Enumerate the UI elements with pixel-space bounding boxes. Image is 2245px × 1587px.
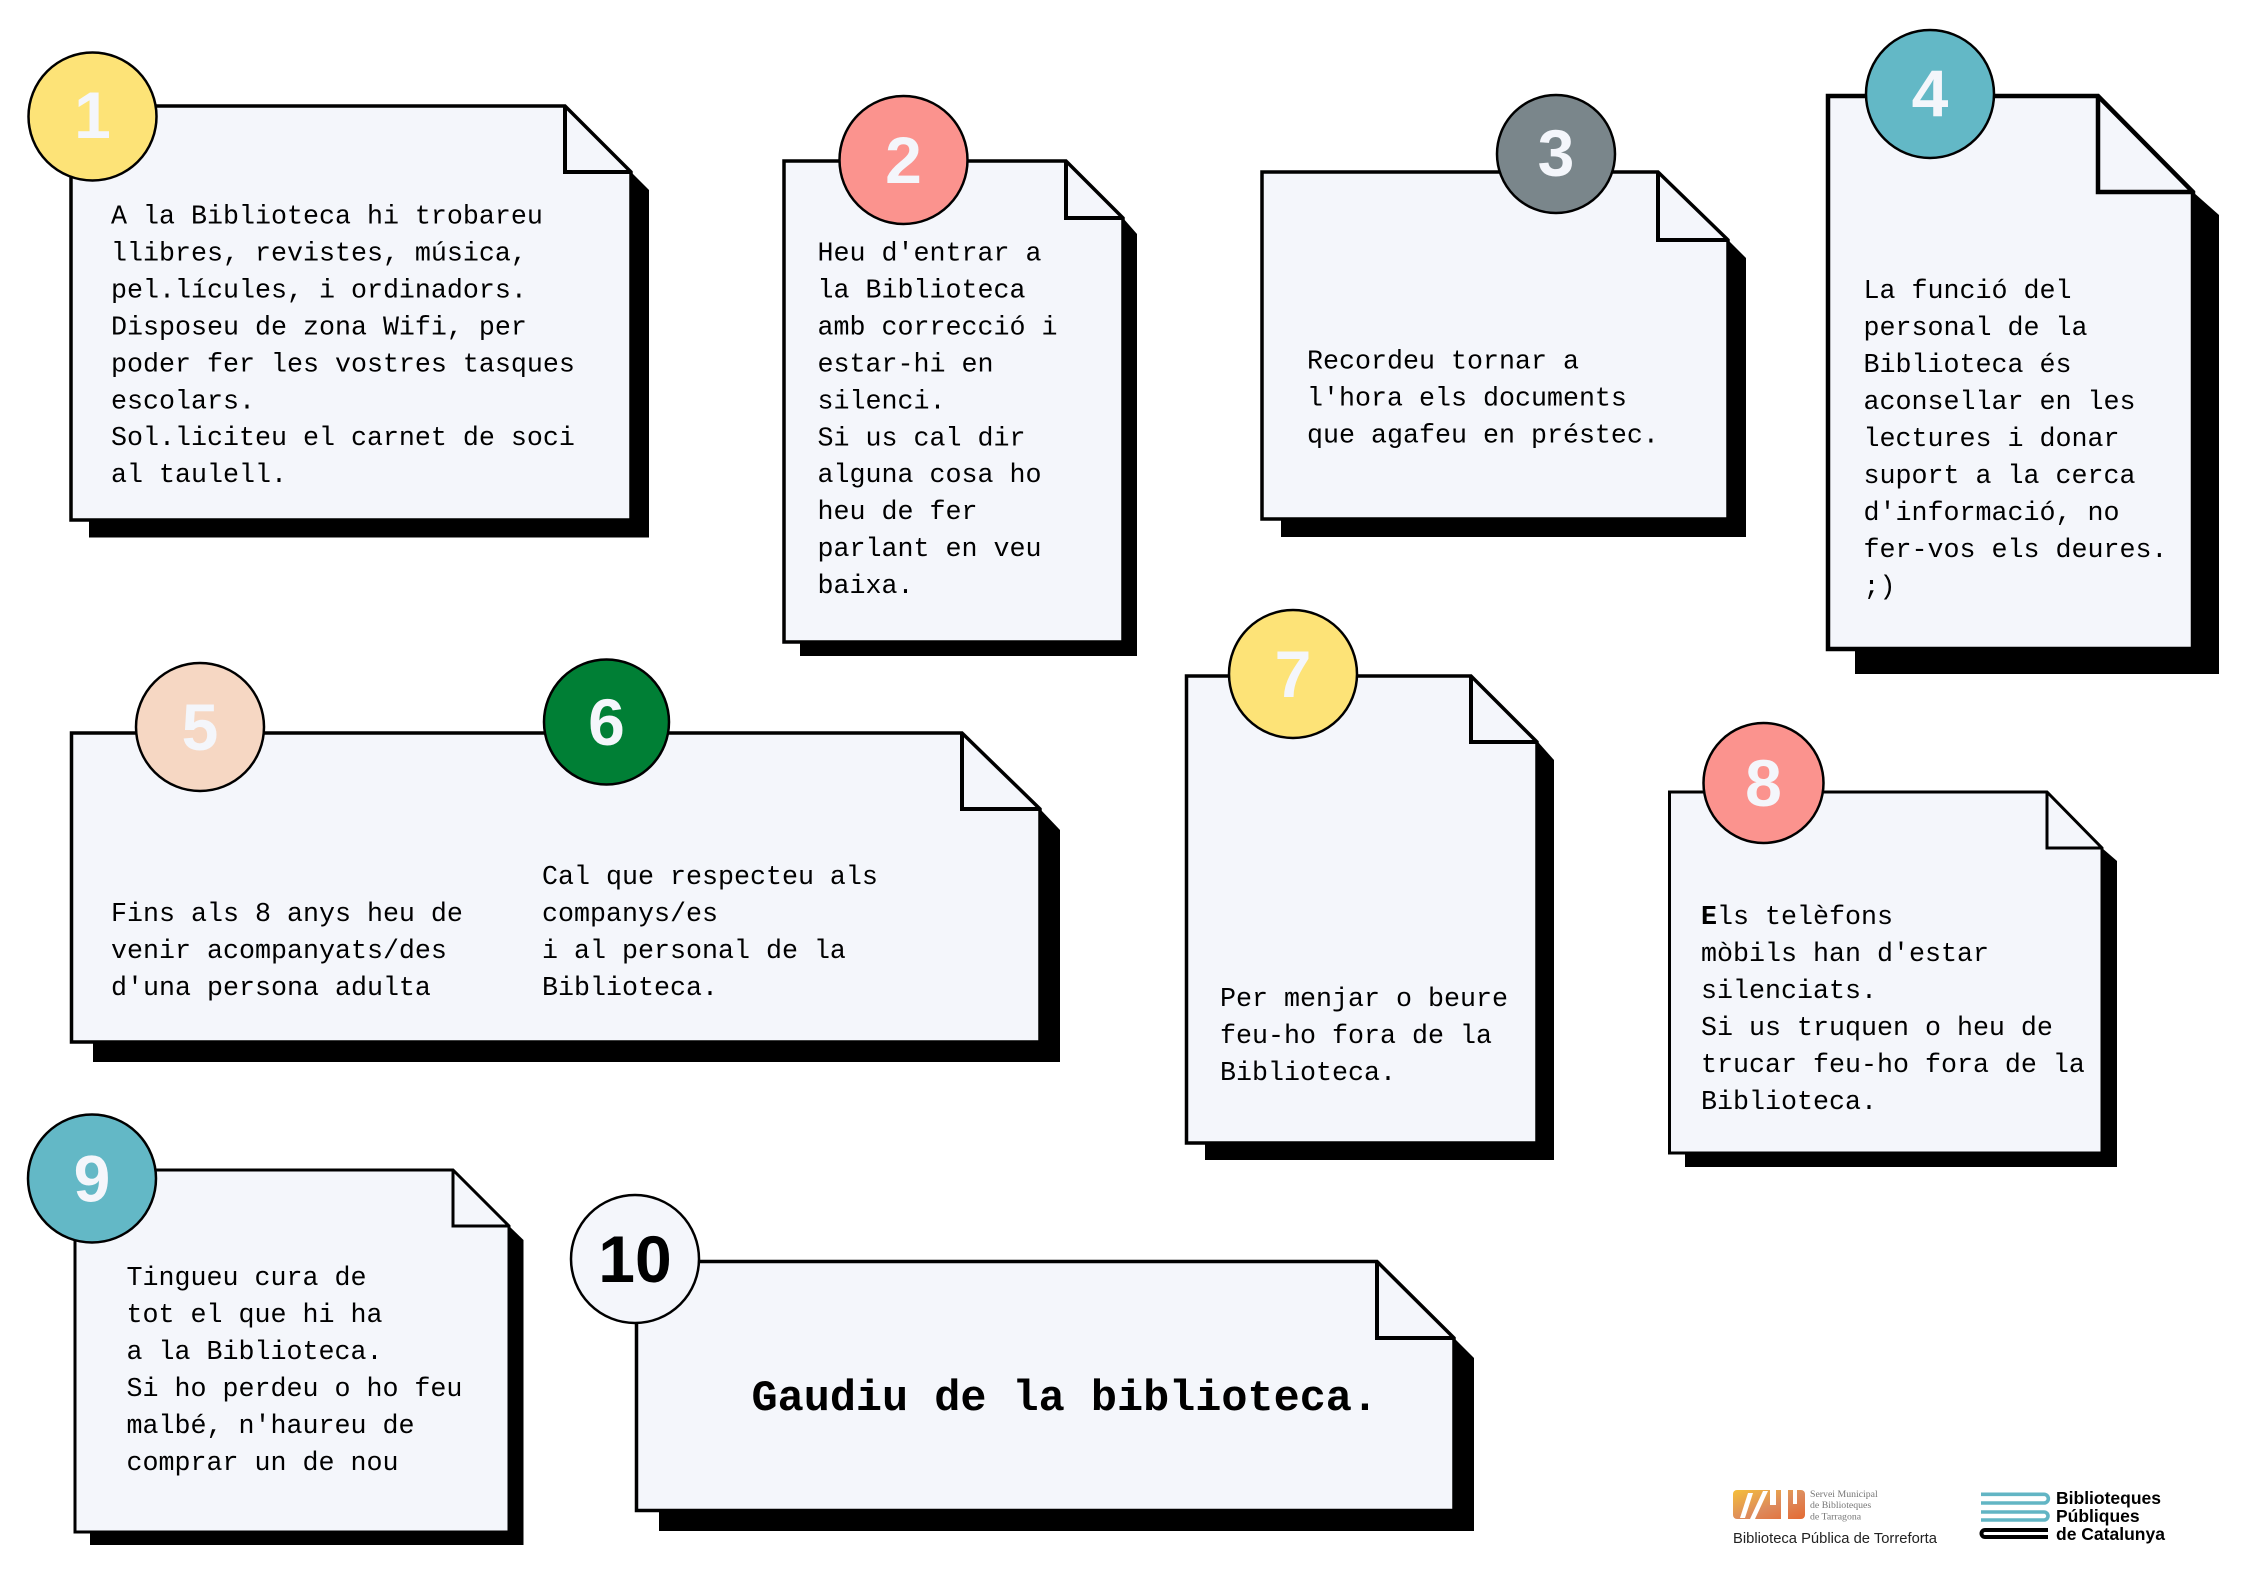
badge 6: 6 [588,685,625,759]
panel: rule 4 [1828,30,2219,674]
badge 3 [1497,95,1615,213]
badge 2 [840,96,968,224]
text: rule 2: baixa. [818,572,913,602]
note sheet 2 [784,161,1123,642]
text: rule 1: llibres, revistes, música, [111,240,527,270]
text: rule 5: Fins als 8 anys heu de [111,900,463,930]
text: rule 9: Si ho perdeu o ho feu [126,1375,462,1405]
logo mark [1733,1490,1805,1519]
panel: rule 3 [1262,95,1746,537]
text: rule 1: Disposeu de zona Wifi, per [111,313,527,343]
text: rule 9: malbé, n'haureu de [126,1412,414,1442]
note sheet 4 [1828,96,2193,649]
panel: rules 5 and 6 [72,660,1060,1062]
text: rule 2: la Biblioteca [818,276,1025,306]
text: rule 4: fer-vos els deures. [1864,536,2167,566]
text: rule 1: poder fer les vostres tasques [111,350,575,380]
panel: rule 2 [784,96,1137,656]
text: rule 9: a la Biblioteca. [126,1338,382,1368]
text: rule 3: l'hora els documents [1307,384,1627,414]
panel: rule 10 [571,1195,1474,1531]
badge 9 [28,1114,156,1242]
text: rule 7: feu-ho fora de la [1220,1022,1492,1052]
text: rule 8: Si us truquen o heu de [1701,1014,2053,1044]
text: rule 9: comprar un de nou [126,1449,398,1479]
text: rule 8: Biblioteca. [1701,1088,1877,1118]
logo: Biblioteca Pública de Torreforta [1733,1489,1938,1547]
badge 5: 5 [182,690,218,764]
text: rule 6: Biblioteca. [542,974,718,1004]
badge 2: 2 [885,123,922,197]
text: rule 2: Si us cal dir [818,424,1025,454]
text: rule 2: Heu d'entrar a [818,240,1041,270]
note sheet 7 [1186,676,1537,1143]
text: rule 4: lectures i donar [1864,425,2119,455]
text: rule 4: suport a la cerca [1864,462,2135,492]
logo mark: book stripes [1981,1494,2048,1537]
badge 4 [1866,30,1994,158]
text: rule 6: companys/es [542,900,718,930]
logo text: Biblioteques [2056,1488,2161,1508]
text: rule 9: Tingueu cura de [126,1264,366,1294]
note sheet 10 [636,1262,1454,1510]
text: rule 5: d'una persona adulta [111,974,431,1004]
text: rule 4: La funció del [1864,277,2071,307]
text: rule 1: A la Biblioteca hi trobareu [111,202,543,232]
panel: rule 7 [1186,610,1554,1160]
badge 6 [544,660,669,784]
badge 1: 1 [74,78,111,152]
badge 10: 10 [598,1222,672,1296]
note sheet 9 [75,1170,509,1532]
text: rule 2: amb correcció i [818,314,1057,344]
text: rule 10: Gaudiu de la biblioteca. [752,1375,1378,1424]
logo text: de Tarragona [1810,1512,1862,1522]
text: rule 4: d'informació, no [1864,499,2119,529]
badge 4: 4 [1912,56,1949,130]
text: rule 2: parlant en veu [818,535,1041,565]
badge 10 [571,1195,699,1323]
text: rule 2: silenci. [818,387,945,417]
text: rule 4: Biblioteca és [1864,351,2071,381]
badge 1 [28,52,156,180]
panel: rule 1 [28,52,649,538]
text: rule 8: trucar feu-ho fora de la [1701,1051,2085,1081]
text: rule 1: escolars. [111,387,255,417]
badge 8 [1704,723,1824,843]
note sheet 3 [1262,172,1728,519]
text: rule 2: alguna cosa ho [818,461,1041,491]
badge 7 [1229,610,1357,738]
logo text: Públiques [2056,1506,2140,1526]
text: rule 6: i al personal de la [542,937,846,967]
text: rule 8: Els telèfons [1701,903,1893,933]
badge 9: 9 [74,1142,110,1216]
badge 3: 3 [1538,116,1574,190]
text: rule 2: heu de fer [818,498,977,528]
note sheet 1 [71,106,631,520]
text: rule 1: al taulell. [111,461,287,491]
logo: Biblioteques Públiques de Catalunya [1981,1488,2165,1544]
text: rule 8: mòbils han d'estar [1701,940,1989,970]
logo: Biblioteca Pública de Torreforta: Biblioteca Pública de Torreforta [1733,1531,1938,1547]
note sheet 8 [1670,792,2102,1153]
text: rule 9: tot el que hi ha [126,1301,382,1331]
note sheet 5 and 6 [72,733,1040,1042]
logo text: de Biblioteques [1810,1500,1871,1511]
text: rule 4: aconsellar en les [1864,388,2135,418]
text: rule 1: Sol.liciteu el carnet de soci [111,424,575,454]
text: rule 2: estar-hi en [818,350,993,380]
text: rule 4: personal de la [1864,314,2087,344]
logo text: de Catalunya [2056,1524,2165,1544]
text: rule 3: Recordeu tornar a [1307,348,1579,378]
badge 5 [136,663,264,791]
badge 7: 7 [1275,637,1311,711]
text: rule 4: ;) [1864,573,1896,603]
text: rule 8: silenciats. [1701,977,1877,1007]
logo text: Servei Municipal [1810,1489,1878,1500]
text: rule 5: venir acompanyats/des [111,937,447,967]
text: rule 7: Biblioteca. [1220,1059,1396,1089]
panel: rule 8 [1670,723,2117,1167]
text: rule 1: pel.lícules, i ordinadors. [111,276,527,306]
text: rule 7: Per menjar o beure [1220,985,1508,1015]
panel: rule 9 [28,1114,524,1545]
text: rule 3: que agafeu en préstec. [1307,422,1659,452]
text: rule 6: Cal que respecteu als [542,863,878,893]
badge 8: 8 [1745,746,1782,820]
